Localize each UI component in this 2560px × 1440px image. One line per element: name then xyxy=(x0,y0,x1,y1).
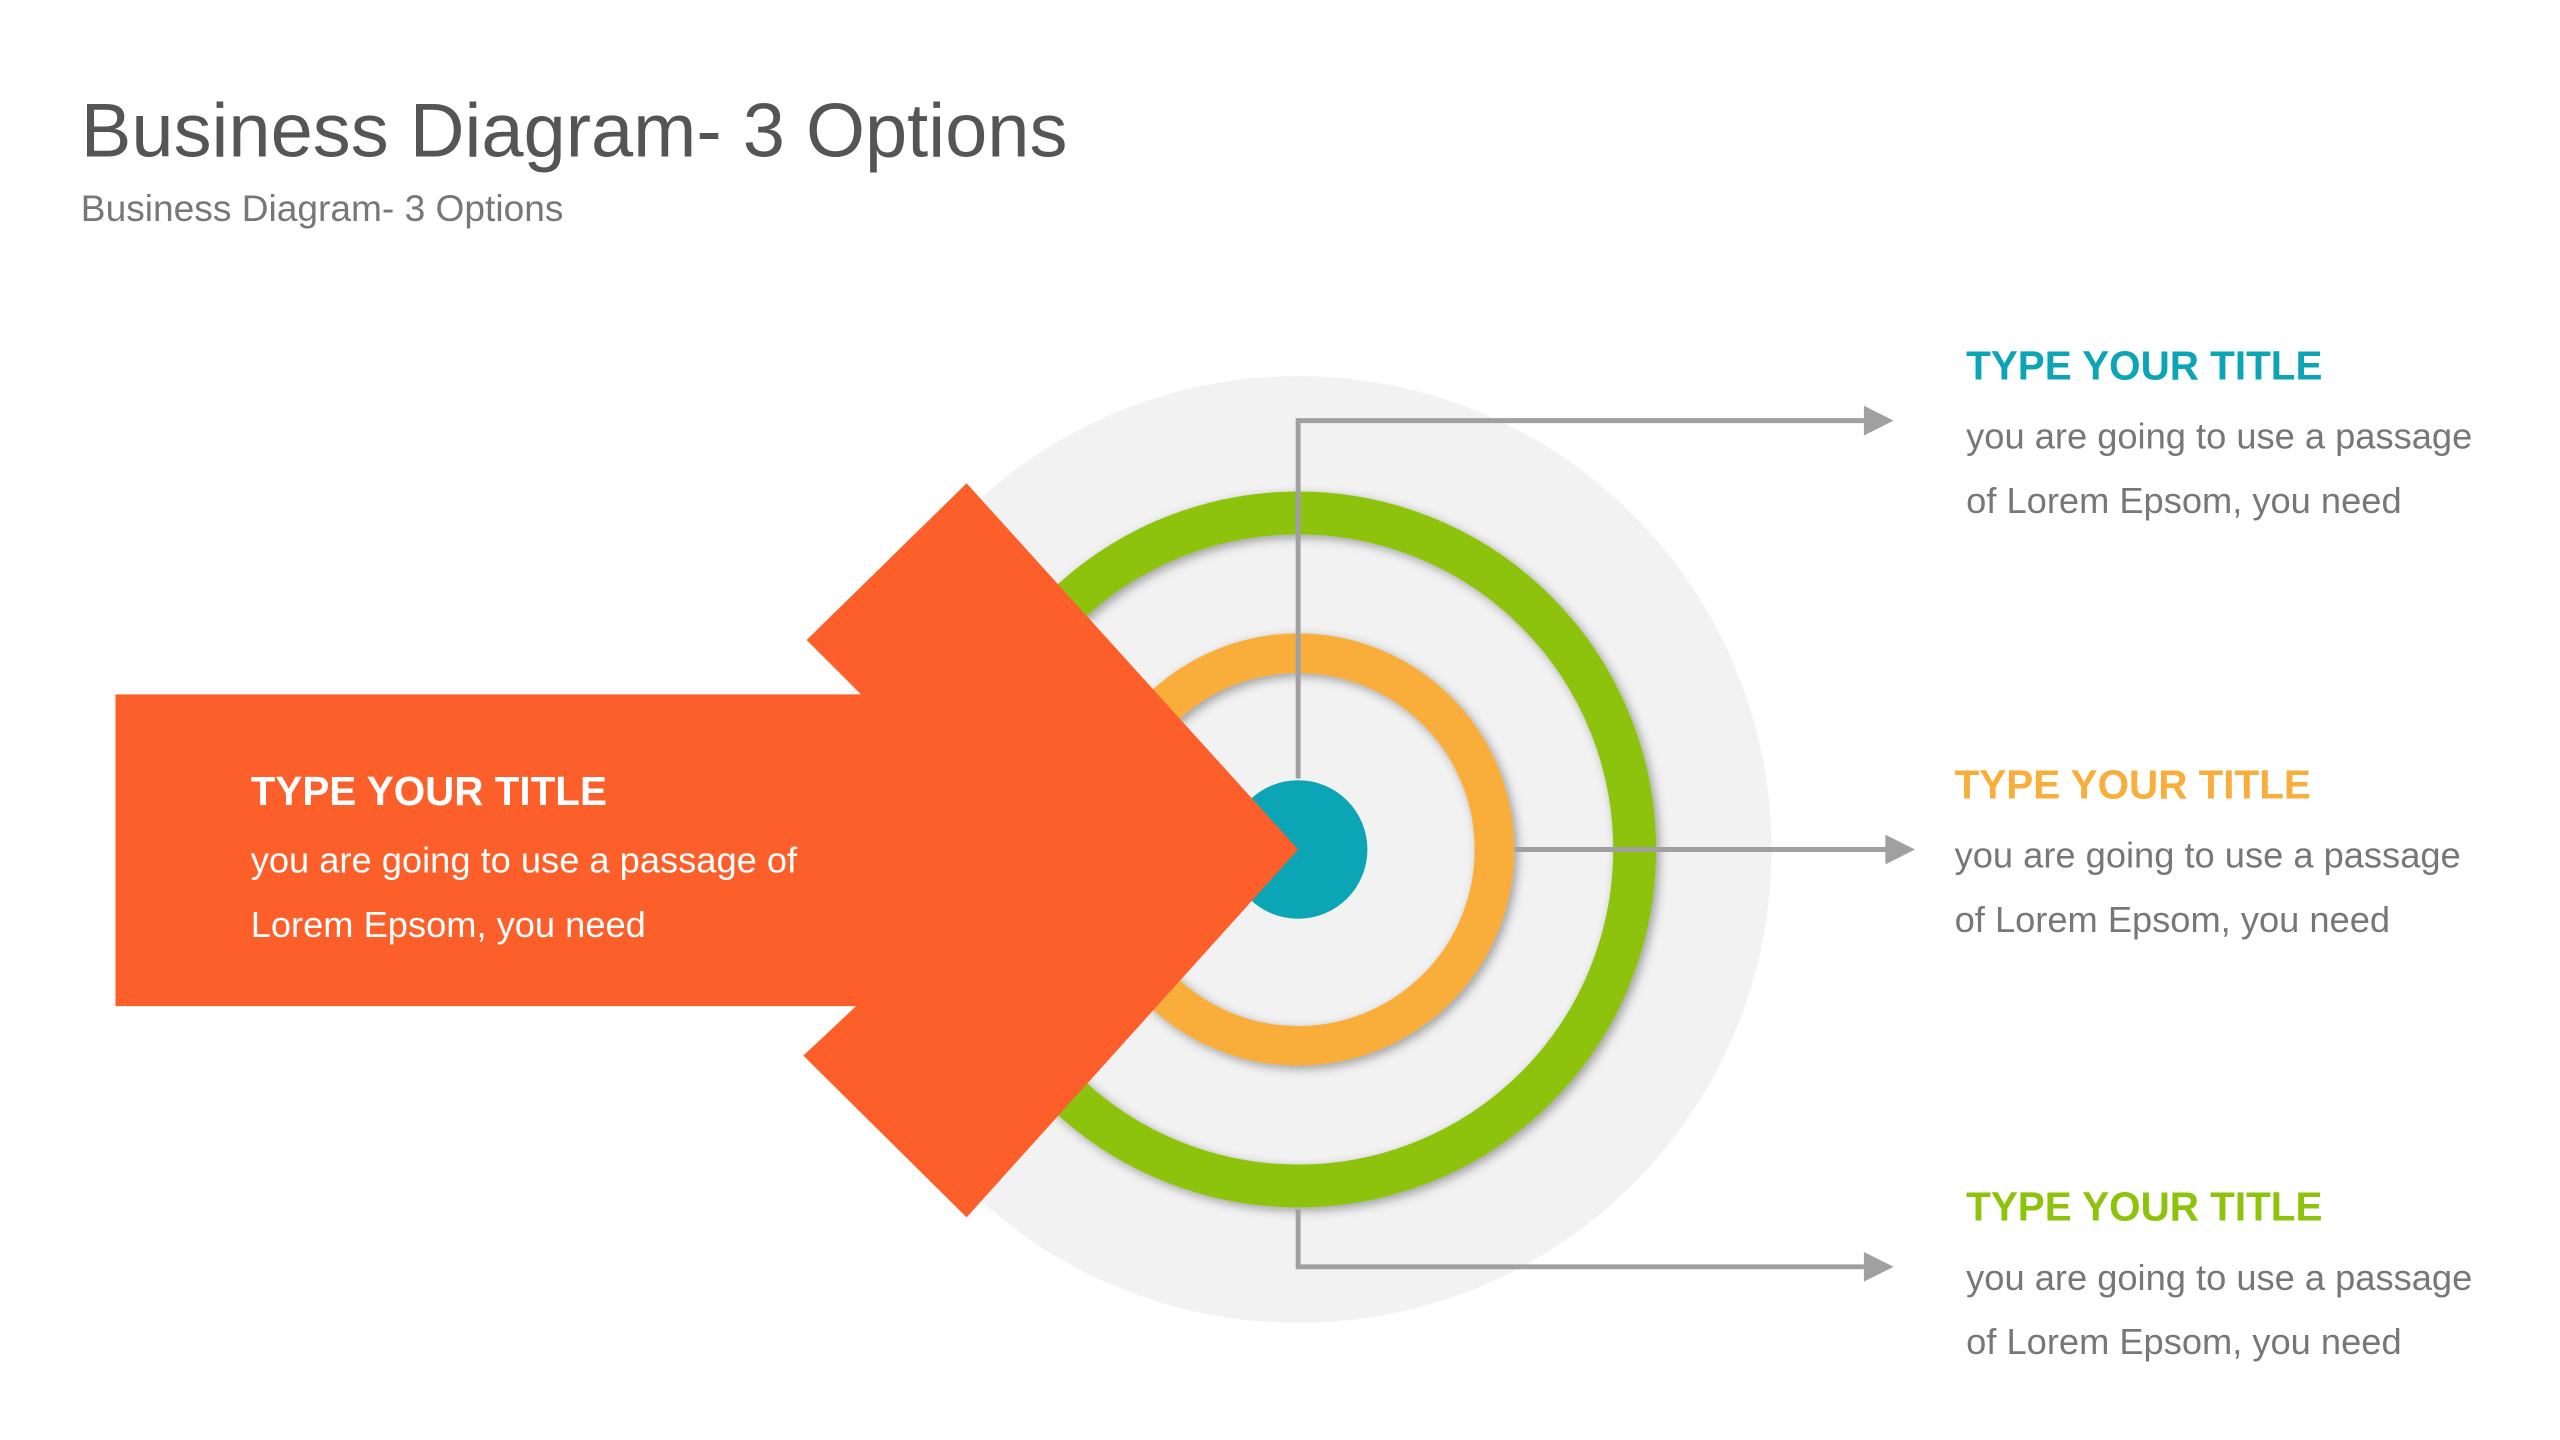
teal center dot xyxy=(1229,780,1367,919)
text block: middle right: TYPE YOUR TITLE xyxy=(1955,761,2311,807)
text block: top right xyxy=(1966,342,2472,521)
text block: bottom right: of Lorem Epsom, you need xyxy=(1966,1321,2402,1362)
connector arrow: top xyxy=(1298,406,1894,779)
green ring xyxy=(962,513,1635,1186)
title: Business Diagram- 3 Options xyxy=(81,89,1067,174)
target diagram xyxy=(825,376,1772,1323)
text block: middle right xyxy=(1955,761,2461,940)
arrow: left xyxy=(115,483,1298,1217)
text block: middle right: of Lorem Epsom, you need xyxy=(1955,899,2390,940)
text block: left xyxy=(251,768,798,945)
text block: bottom right: you are going to use a passage xyxy=(1966,1257,2472,1298)
text block: top right: of Lorem Epsom, you need xyxy=(1966,480,2402,521)
text block: top right: you are going to use a passage xyxy=(1966,416,2472,457)
text block: left: you are going to use a passage of xyxy=(251,840,798,881)
connector arrow: bottom xyxy=(1298,1209,1894,1282)
text block: middle right: you are going to use a passage xyxy=(1955,835,2461,876)
connector arrow: middle xyxy=(1514,835,1915,864)
text block: left: TYPE YOUR TITLE xyxy=(251,768,607,814)
background circle xyxy=(825,376,1772,1323)
subtitle: Business Diagram- 3 Options xyxy=(81,187,563,229)
text block: bottom right: TYPE YOUR TITLE xyxy=(1966,1184,2322,1230)
text block: bottom right xyxy=(1966,1184,2472,1362)
text block: left: Lorem Epsom, you need xyxy=(251,904,646,945)
text block: top right: TYPE YOUR TITLE xyxy=(1966,342,2322,388)
orange ring xyxy=(1102,653,1494,1046)
